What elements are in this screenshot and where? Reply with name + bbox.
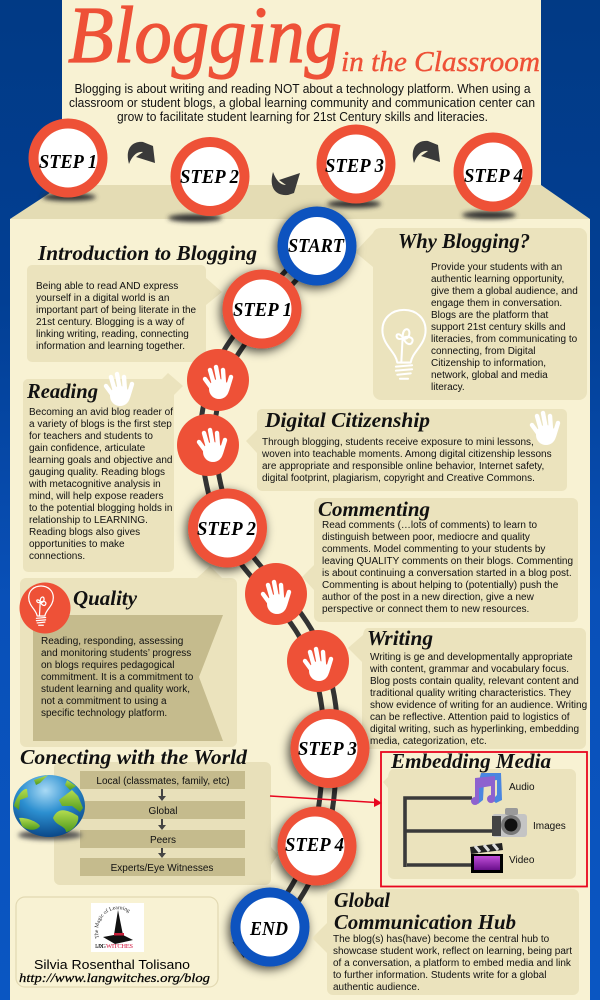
box: peers: Peers	[150, 835, 176, 846]
flow arrows	[158, 789, 166, 858]
panel: digital citizenship: woven into teachable moments. Among digital citizenship lessons	[261, 449, 552, 460]
panel: embedding media: Embedding Media	[390, 749, 551, 773]
panel: writing: digital writing, such as hyperlinking, embedding	[370, 724, 579, 735]
media labels: Audio	[509, 782, 535, 793]
panel: writing: traditional quality writing characteristics. They	[370, 688, 571, 699]
panel: writing	[348, 626, 587, 749]
panel: connecting with the world: Conecting with the World	[20, 745, 248, 769]
panel: quality: Reading, responding, assessing	[41, 636, 183, 647]
panel: why blogging: Blogs are the platform that	[431, 310, 549, 321]
hand node 4	[287, 630, 349, 692]
panel: writing: show evidence of writing for an audience. Writing	[370, 700, 587, 711]
panel: quality: student learning and quality work,	[41, 684, 190, 695]
step 2 node	[188, 488, 267, 568]
panel: reading: to the potential blogging holds in	[29, 503, 172, 514]
icon: reading hand	[106, 374, 132, 406]
panel: reading: connections.	[29, 551, 85, 562]
media labels: Images	[533, 821, 566, 832]
panel: global communication hub: authentic audience.	[333, 982, 420, 993]
logo	[91, 903, 144, 952]
panel: commenting: is about continuing a conversation started in a blog post.	[322, 568, 572, 579]
panel: why blogging: literacy.	[431, 382, 465, 393]
panel: commenting	[302, 497, 578, 622]
title: in the Classroom	[341, 46, 540, 78]
top step 3	[316, 124, 396, 204]
panel: reading: Reading	[26, 379, 98, 403]
panel: global communication hub: showcase student work, reflect on learning, being part	[333, 946, 572, 957]
logo: LANG	[95, 943, 106, 950]
box: experts	[80, 858, 245, 876]
panel: why blogging: Why Blogging?	[398, 229, 530, 253]
panel: quality: not a commitment to using a	[41, 696, 167, 707]
step 2 node: STEP 2	[197, 518, 256, 540]
step 4 node: STEP 4	[285, 834, 344, 856]
icon: clapperboard	[470, 843, 503, 873]
panel: digital citizenship	[246, 408, 567, 491]
step 4 node	[278, 806, 356, 886]
panel: commenting: Commenting	[318, 497, 430, 521]
ribbon	[33, 615, 223, 741]
heading: Global	[334, 888, 390, 912]
media tree	[405, 798, 494, 867]
hand node 1	[187, 349, 249, 411]
panel: introduction: important part of being literate in the	[36, 305, 197, 316]
icon: light bulb	[382, 310, 426, 379]
panel: quality: on blogs requires pedagogical	[41, 660, 174, 671]
panel: introduction: Introduction to Blogging	[37, 241, 257, 265]
top step 1	[28, 118, 108, 198]
panel: why blogging: literacies, from communicating to	[431, 334, 578, 345]
main panel	[10, 219, 590, 1000]
panel: why blogging	[355, 228, 587, 400]
icon: quality bulb	[20, 582, 70, 634]
box: global: Global	[149, 806, 177, 817]
panel: commenting: leaving QUALITY comments on their blogs. Commenting	[322, 556, 573, 567]
panel: introduction: information and learning together.	[36, 341, 185, 352]
box: experts: Experts/Eye Witnesses	[111, 863, 213, 874]
top step 1: STEP 1	[39, 151, 97, 173]
panel: author credit: Silvia Rosenthal Tolisano	[34, 957, 190, 972]
icon: globe	[13, 775, 85, 840]
panel: reading: Becoming an avid blog reader of	[29, 407, 173, 418]
panel: author credit	[16, 896, 218, 988]
panel: digital citizenship: digital footprint, plagiarism, copyright and Creative Commons.	[262, 473, 535, 484]
panel: quality	[20, 566, 237, 747]
panel: why blogging: connecting, from Digital	[431, 346, 536, 357]
panel: writing: media, categorization, etc.	[370, 736, 487, 747]
hand node 2	[177, 414, 239, 476]
intro text: Blogging is about writing and reading NOT about a technology platform. When using a	[74, 82, 531, 96]
intro text: classroom or student blogs, a global learning community and communication center can	[69, 96, 535, 110]
step 3 node: STEP 3	[298, 738, 357, 760]
arrow 3	[413, 141, 440, 163]
box: local: Local (classmates, family, etc)	[96, 776, 230, 787]
panel: digital citizenship: are appropriate and responsible online behavior, Internet safety,	[262, 461, 544, 472]
media labels	[509, 782, 566, 866]
panel: introduction: 21st century. Blogging is a way of	[36, 317, 184, 328]
panel: embedding media	[381, 749, 587, 886]
title	[68, 0, 540, 80]
panel: author credit: http://www.langwitches.org/blog	[19, 970, 211, 985]
red arrow	[270, 796, 382, 807]
end node	[230, 888, 310, 966]
icon: citizenship hand	[532, 413, 558, 445]
panel: commenting: Commenting is about helping to (potentially) push the	[322, 580, 559, 591]
panel: global communication hub: to further information. Students write for a global	[333, 970, 546, 981]
box: local	[80, 771, 245, 789]
top step 4: STEP 4	[464, 165, 523, 187]
panel: commenting: Read comments (…lots of comments) to learn to	[322, 520, 538, 531]
step 1 node: STEP 1	[233, 299, 292, 321]
top step 2	[170, 137, 250, 216]
panel: reading: gauging quality. Reading blogs	[29, 467, 165, 478]
panel: global communication hub	[312, 888, 579, 995]
panel: global communication hub: The blog(s) has(have) become the central hub to	[333, 934, 550, 945]
panel: writing: Writing is ge and developmentally appropriate	[370, 652, 573, 663]
shelf	[10, 185, 590, 219]
panel: writing: can be reflective. Attention paid to logistics of	[370, 712, 570, 723]
arrow 2	[272, 172, 300, 195]
panel: commenting: perspective or connect them to new resources.	[322, 604, 529, 615]
panel: why blogging: Provide your students with an	[431, 262, 562, 273]
panel: reading: mind, will help expose readers	[29, 491, 164, 502]
panel: why blogging: give them a global audience, and	[431, 286, 578, 297]
panel: reading	[23, 373, 183, 572]
logo: The Magic of Learning	[94, 906, 130, 939]
panel: introduction	[27, 241, 257, 362]
arrow 1	[128, 142, 155, 164]
panel: why blogging: engage them in conversation.	[431, 298, 562, 309]
panel: digital citizenship: Digital Citizenship	[264, 408, 430, 432]
panel: reading: gain confidence, articulate	[29, 443, 146, 454]
end node: END	[249, 918, 288, 940]
top step 2: STEP 2	[180, 166, 239, 188]
road	[207, 246, 330, 950]
header backdrop	[62, 0, 541, 186]
panel: why blogging: Citizenship to information,	[431, 358, 546, 369]
icon: music	[471, 773, 502, 805]
step 3 node	[290, 709, 370, 788]
panel: introduction: Being able to read AND express	[36, 281, 178, 292]
heading: Communication Hub	[334, 910, 516, 934]
panel: writing: Writing	[367, 626, 433, 650]
panel: why blogging: support 21st century skills and	[431, 322, 566, 333]
panel: reading: Reading blogs also gives	[29, 527, 140, 538]
panel: quality: specific technology platform.	[41, 708, 167, 719]
panel: digital citizenship: Through blogging, students receive exposure to mini lessons,	[262, 437, 534, 448]
panel: reading: opportunities to make	[29, 539, 125, 550]
panel: why blogging: network, global and media	[431, 370, 548, 381]
panel: connecting with the world	[20, 745, 278, 885]
panel: reading: with metacognitive analysis in	[28, 479, 161, 490]
panel: reading: a variety of blogs is the first step	[29, 419, 172, 430]
step 1 node	[222, 270, 302, 348]
panel: commenting: comments. Model commenting to your students by	[322, 544, 545, 555]
panel: introduction: linking writing, reading, connecting	[36, 329, 189, 340]
panel: reading: for teachers and students to	[29, 431, 153, 442]
panel: commenting: author of the post in a new direction, give a new	[322, 592, 535, 603]
box: global	[80, 801, 245, 819]
hand node 3	[245, 563, 307, 625]
panel: reading: relationship to LEARNING.	[29, 515, 148, 526]
panel: why blogging: authentic learning opportunity,	[431, 274, 564, 285]
box: peers	[80, 830, 245, 848]
logo: WITCHES	[106, 943, 133, 950]
top step shadows	[42, 193, 516, 222]
panel: writing: Blog posts contain quality, relevant content and	[370, 676, 579, 687]
panel: commenting: distinguish between poor, mediocre and quality	[322, 532, 530, 543]
intro text: grow to facilitate student learning for 21st Century skills and literacies.	[117, 110, 488, 124]
top step 3: STEP 3	[325, 155, 384, 177]
panel: global communication hub: of a conversation, a platform to embed media and link	[333, 958, 572, 969]
start node	[278, 206, 356, 286]
panel: quality: and monitoring students’ progress	[41, 648, 191, 659]
icon: camera	[492, 808, 527, 837]
media labels: Video	[509, 855, 535, 866]
panel: writing: with content, grammar and vocabulary focus.	[369, 664, 569, 675]
panel: quality: commitment. It is a commitment to	[41, 672, 194, 683]
top step 4	[454, 132, 532, 212]
panel: reading: learning goals and objective and	[29, 455, 172, 466]
panel: quality: Quality	[73, 586, 138, 610]
panel: introduction: yourself in a digital world is an	[36, 293, 169, 304]
start node: START	[288, 235, 345, 257]
